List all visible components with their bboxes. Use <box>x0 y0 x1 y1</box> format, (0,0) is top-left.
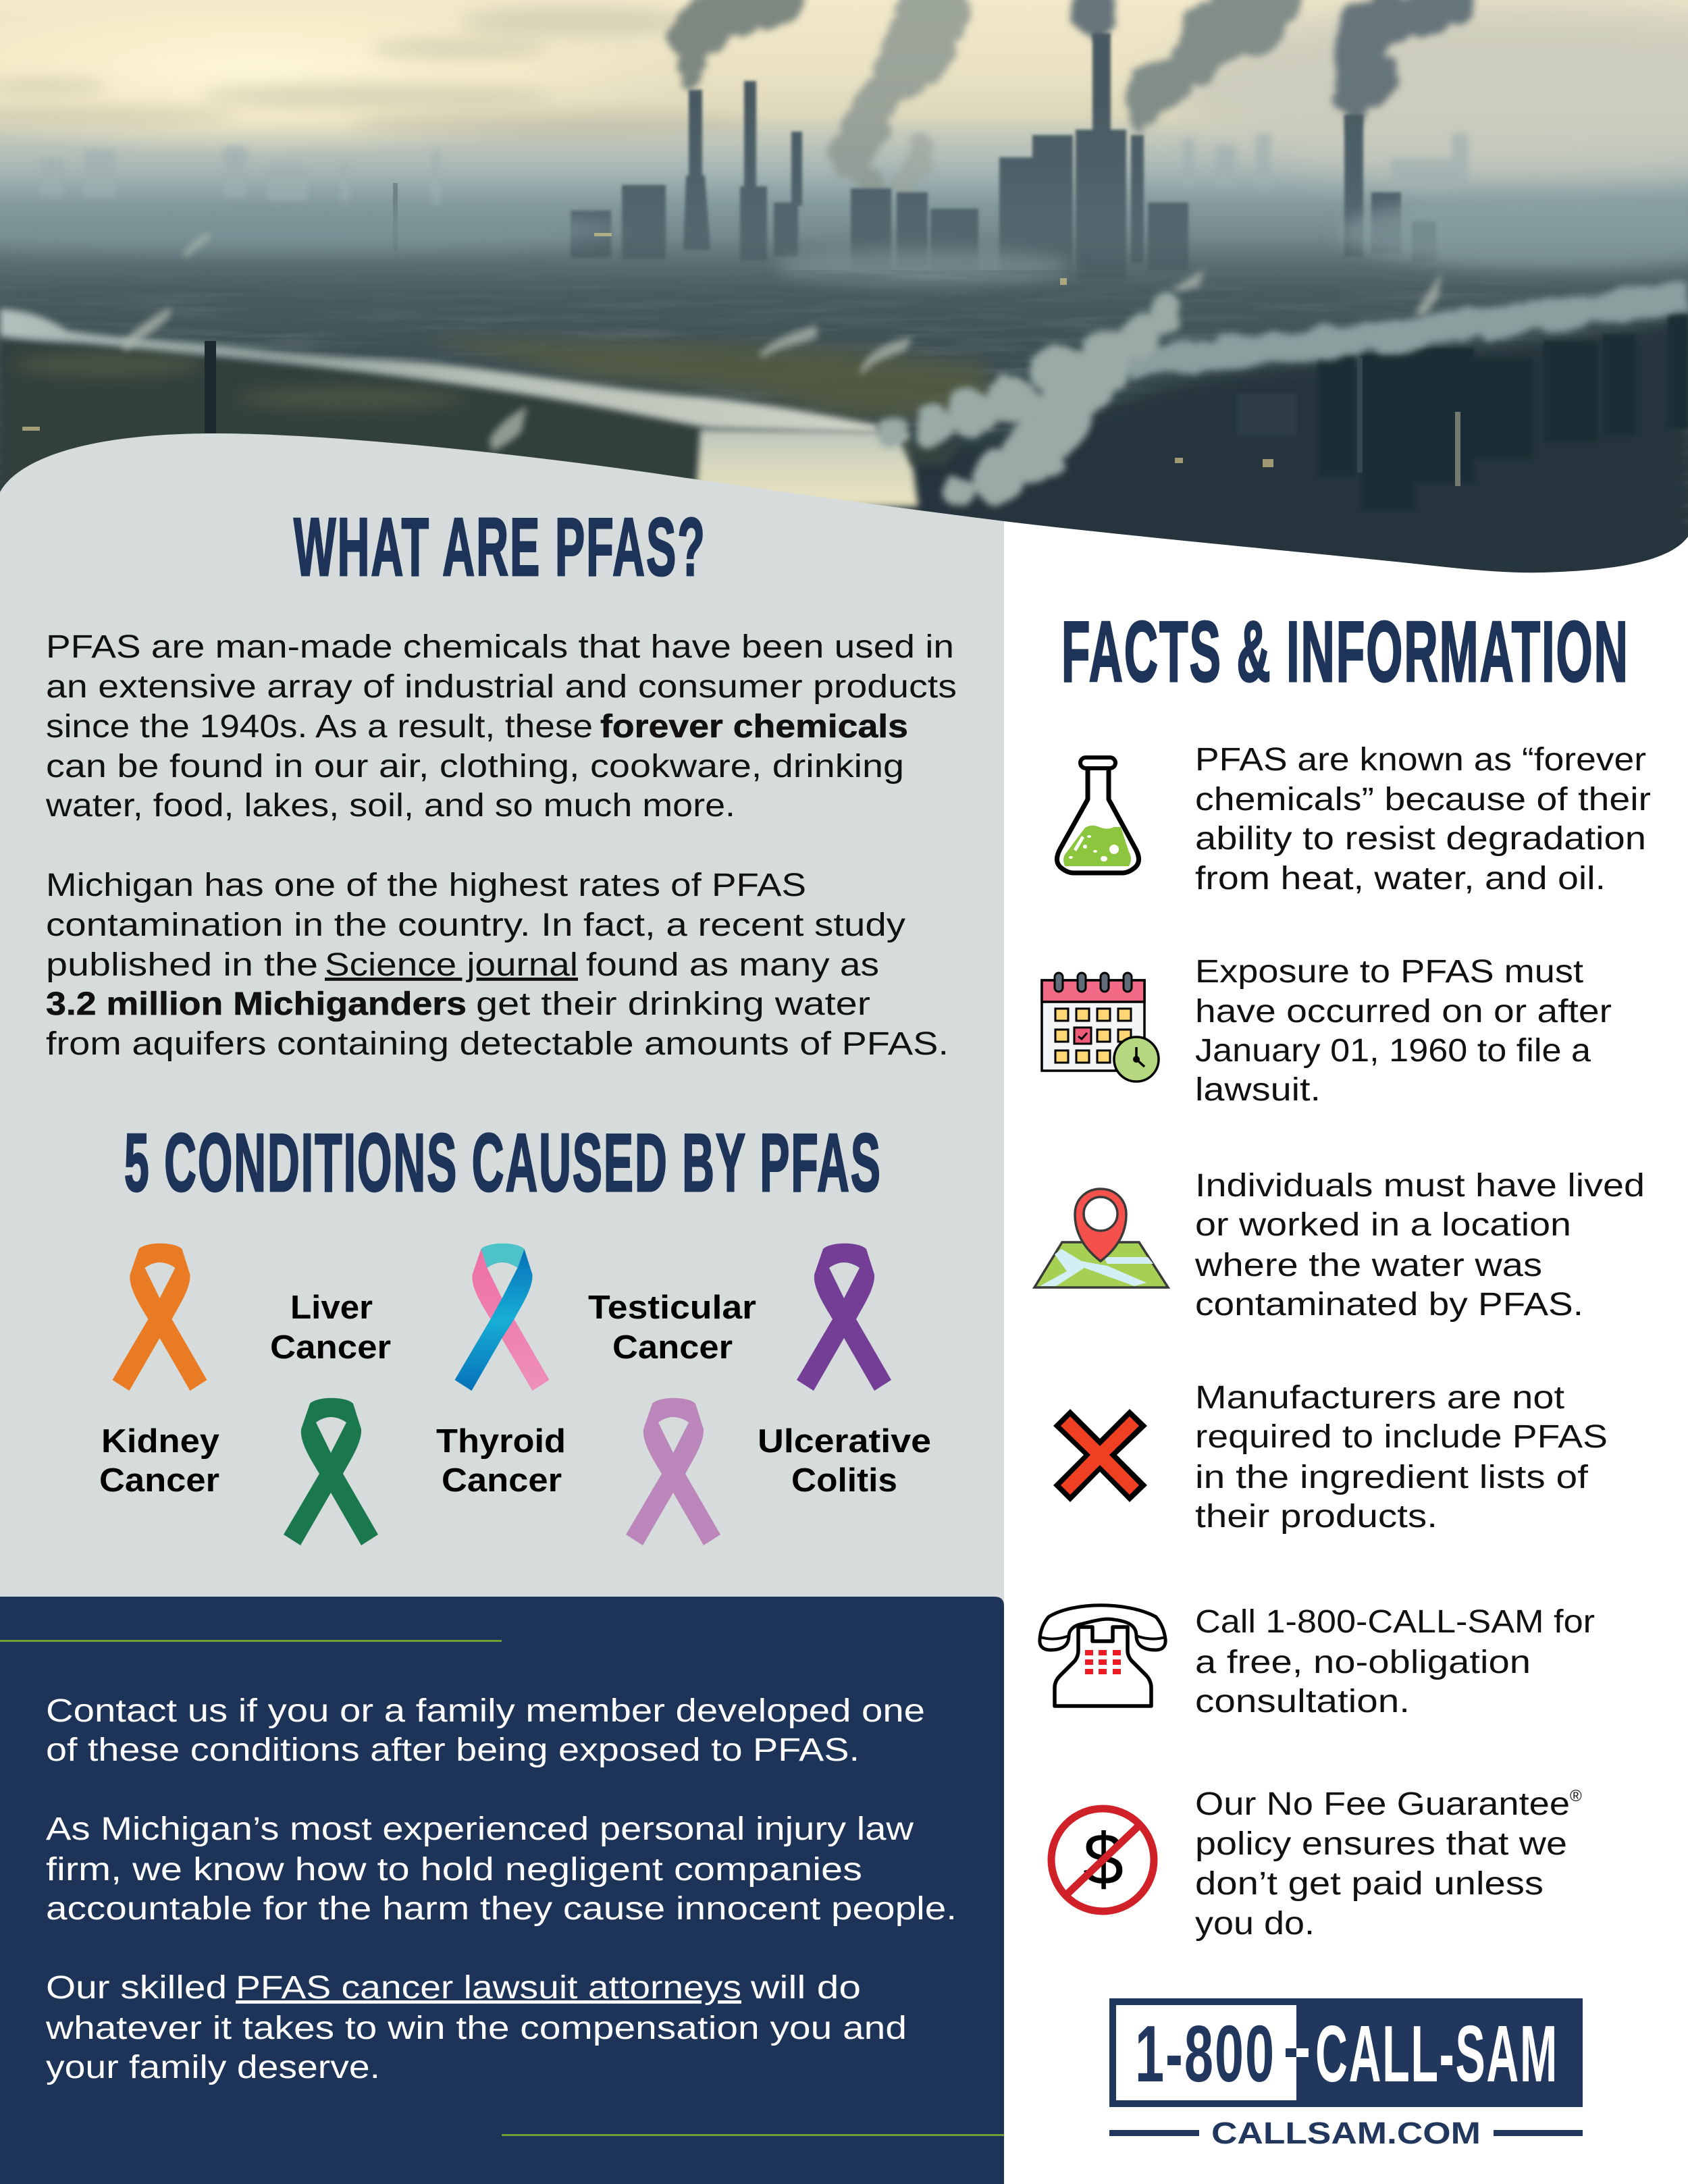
text block: no fee guarantee: don’t get paid unless <box>1195 1866 1544 1902</box>
text block: location: contaminated by PFAS. <box>1195 1287 1583 1323</box>
text block: free consultation: a free, no-obligation <box>1195 1645 1531 1680</box>
text block: no fee guarantee: ® <box>1570 1787 1582 1805</box>
icon: map and location pin <box>1034 1189 1168 1287</box>
logo: 1-800-CALL-SAM: CALLSAM.COM <box>1211 2116 1481 2150</box>
text block: manufacturers: their products. <box>1195 1499 1438 1535</box>
icon: telephone <box>1040 1605 1165 1706</box>
text block: exposure date: have occurred on or after <box>1195 994 1612 1030</box>
text block: PFAS intro: can be found in our air, clothing, cookware, drinking <box>46 749 904 784</box>
text block: Michigan contamination: 3.2 million Michiganders <box>46 986 467 1022</box>
icon: green ribbon, liver cancer <box>284 1398 378 1545</box>
logo: 1-800-CALL-SAM: 1-800 <box>1135 2009 1275 2099</box>
text block: free consultation <box>1195 1604 1595 1720</box>
heading: what are PFAS: WHAT ARE PFAS? <box>294 501 706 593</box>
icon: no dollar sign: $ <box>1083 1818 1124 1900</box>
text block: contact us: whatever it takes to win the compensation you and <box>45 2010 907 2046</box>
text block: location: where the water was <box>1194 1248 1542 1283</box>
photo: industrial skyline with smokestacks <box>0 0 1688 581</box>
label: kidney cancer: Kidney <box>101 1423 219 1460</box>
panel: navy contact block <box>0 1597 1004 2184</box>
label: testicular cancer: Cancer <box>612 1329 733 1366</box>
label: liver cancer: Cancer <box>270 1329 391 1366</box>
text block: Michigan contamination <box>46 868 949 1062</box>
label: ulcerative colitis: Ulcerative <box>758 1423 931 1460</box>
label: liver cancer <box>270 1289 391 1366</box>
label: liver cancer: Liver <box>290 1289 373 1326</box>
icon: orange ribbon, kidney cancer <box>112 1244 207 1391</box>
text block: exposure date: lawsuit. <box>1195 1072 1321 1108</box>
text block: PFAS intro: PFAS are man-made chemicals that have been used in <box>46 629 954 665</box>
label: testicular cancer <box>588 1289 756 1366</box>
text block: contact us: will do <box>750 1970 861 2006</box>
text block: location: Individuals must have lived <box>1195 1168 1645 1204</box>
text block: PFAS intro: forever chemicals <box>600 709 908 745</box>
text block: PFAS intro: water, food, lakes, soil, and so much more. <box>45 788 735 824</box>
text block: contact us <box>45 1693 957 2085</box>
text block: Michigan contamination: from aquifers containing detectable amounts of PFAS. <box>46 1026 949 1062</box>
icon: pink and blue ribbon, thyroid cancer <box>455 1244 550 1391</box>
label: testicular cancer: Testicular <box>588 1289 756 1326</box>
text block: PFAS intro: an extensive array of industrial and consumer products <box>46 669 957 705</box>
text block: Michigan contamination: published in the <box>46 947 318 983</box>
icon: flask <box>1057 757 1139 873</box>
text block: contact us: accountable for the harm they cause innocent people. <box>46 1891 957 1927</box>
text block: forever chemicals: chemicals” because of their <box>1195 782 1651 818</box>
text block: exposure date <box>1195 954 1612 1108</box>
text block: forever chemicals: from heat, water, and oil. <box>1195 861 1606 897</box>
text block: manufacturers: in the ingredient lists of <box>1195 1460 1589 1495</box>
text block: Michigan contamination: Science journal <box>325 947 578 983</box>
panel: gray left column <box>0 433 1004 1607</box>
label: thyroid cancer <box>436 1423 566 1499</box>
text block: forever chemicals: PFAS are known as “forever <box>1195 742 1646 778</box>
text block: contact us: Contact us if you or a family member developed one <box>46 1693 925 1729</box>
text block: forever chemicals <box>1195 742 1651 897</box>
label: ulcerative colitis <box>758 1423 931 1499</box>
text block: PFAS intro: since the 1940s. As a result, these <box>46 709 593 745</box>
icon: purple ribbon, ulcerative colitis <box>797 1244 891 1391</box>
text block: manufacturers <box>1195 1380 1608 1535</box>
text block: no fee guarantee: Our No Fee Guarantee <box>1195 1786 1570 1822</box>
text block: Michigan contamination: found as many as <box>586 947 879 983</box>
icon: calendar and clock <box>1042 973 1159 1082</box>
text block: PFAS intro <box>45 629 957 824</box>
text block: Michigan contamination: contamination in the country. In fact, a recent study <box>46 907 905 943</box>
text block: location: or worked in a location <box>1195 1207 1571 1243</box>
label: thyroid cancer: Thyroid <box>436 1423 566 1460</box>
white background: right column <box>1004 521 1688 2184</box>
conditions: ribbons and labels <box>99 1244 931 1545</box>
text block: manufacturers: Manufacturers are not <box>1195 1380 1564 1416</box>
text block: Michigan contamination: get their drinking water <box>476 986 870 1022</box>
text block: free consultation: consultation. <box>1195 1684 1410 1720</box>
text block: contact us: of these conditions after being exposed to PFAS. <box>46 1732 860 1768</box>
text block: Michigan contamination: Michigan has one of the highest rates of PFAS <box>46 868 806 903</box>
text block: exposure date: Exposure to PFAS must <box>1195 954 1583 990</box>
text block: location <box>1194 1168 1645 1323</box>
text block: contact us: your family deserve. <box>46 2050 380 2085</box>
text block: no fee guarantee: policy ensures that we <box>1195 1826 1567 1862</box>
icon: mauve ribbon, testicular cancer <box>626 1398 720 1545</box>
text block: contact us: Our skilled <box>46 1970 227 2006</box>
text block: manufacturers: required to include PFAS <box>1195 1419 1608 1455</box>
label: kidney cancer: Cancer <box>99 1462 219 1499</box>
icon: red X <box>1053 1409 1147 1502</box>
icon: no dollar sign <box>1051 1809 1154 1911</box>
text block: contact us: PFAS cancer lawsuit attorneys <box>236 1970 741 2006</box>
text block: exposure date: January 01, 1960 to file a <box>1195 1033 1591 1069</box>
text block: no fee guarantee: you do. <box>1195 1906 1315 1942</box>
logo: 1-800-CALL-SAM <box>1109 1998 1583 2150</box>
label: thyroid cancer: Cancer <box>442 1462 562 1499</box>
heading: 5 conditions: 5 CONDITIONS CAUSED BY PFAS <box>124 1117 882 1208</box>
text block: contact us: As Michigan’s most experienced personal injury law <box>46 1811 914 1847</box>
text block: no fee guarantee <box>1195 1786 1582 1942</box>
label: ulcerative colitis: Colitis <box>791 1462 897 1499</box>
text block: contact us: firm, we know how to hold negligent companies <box>46 1852 862 1888</box>
label: kidney cancer <box>99 1423 219 1499</box>
text block: forever chemicals: ability to resist degradation <box>1195 821 1646 857</box>
text block: free consultation: Call 1-800-CALL-SAM for <box>1195 1604 1595 1640</box>
